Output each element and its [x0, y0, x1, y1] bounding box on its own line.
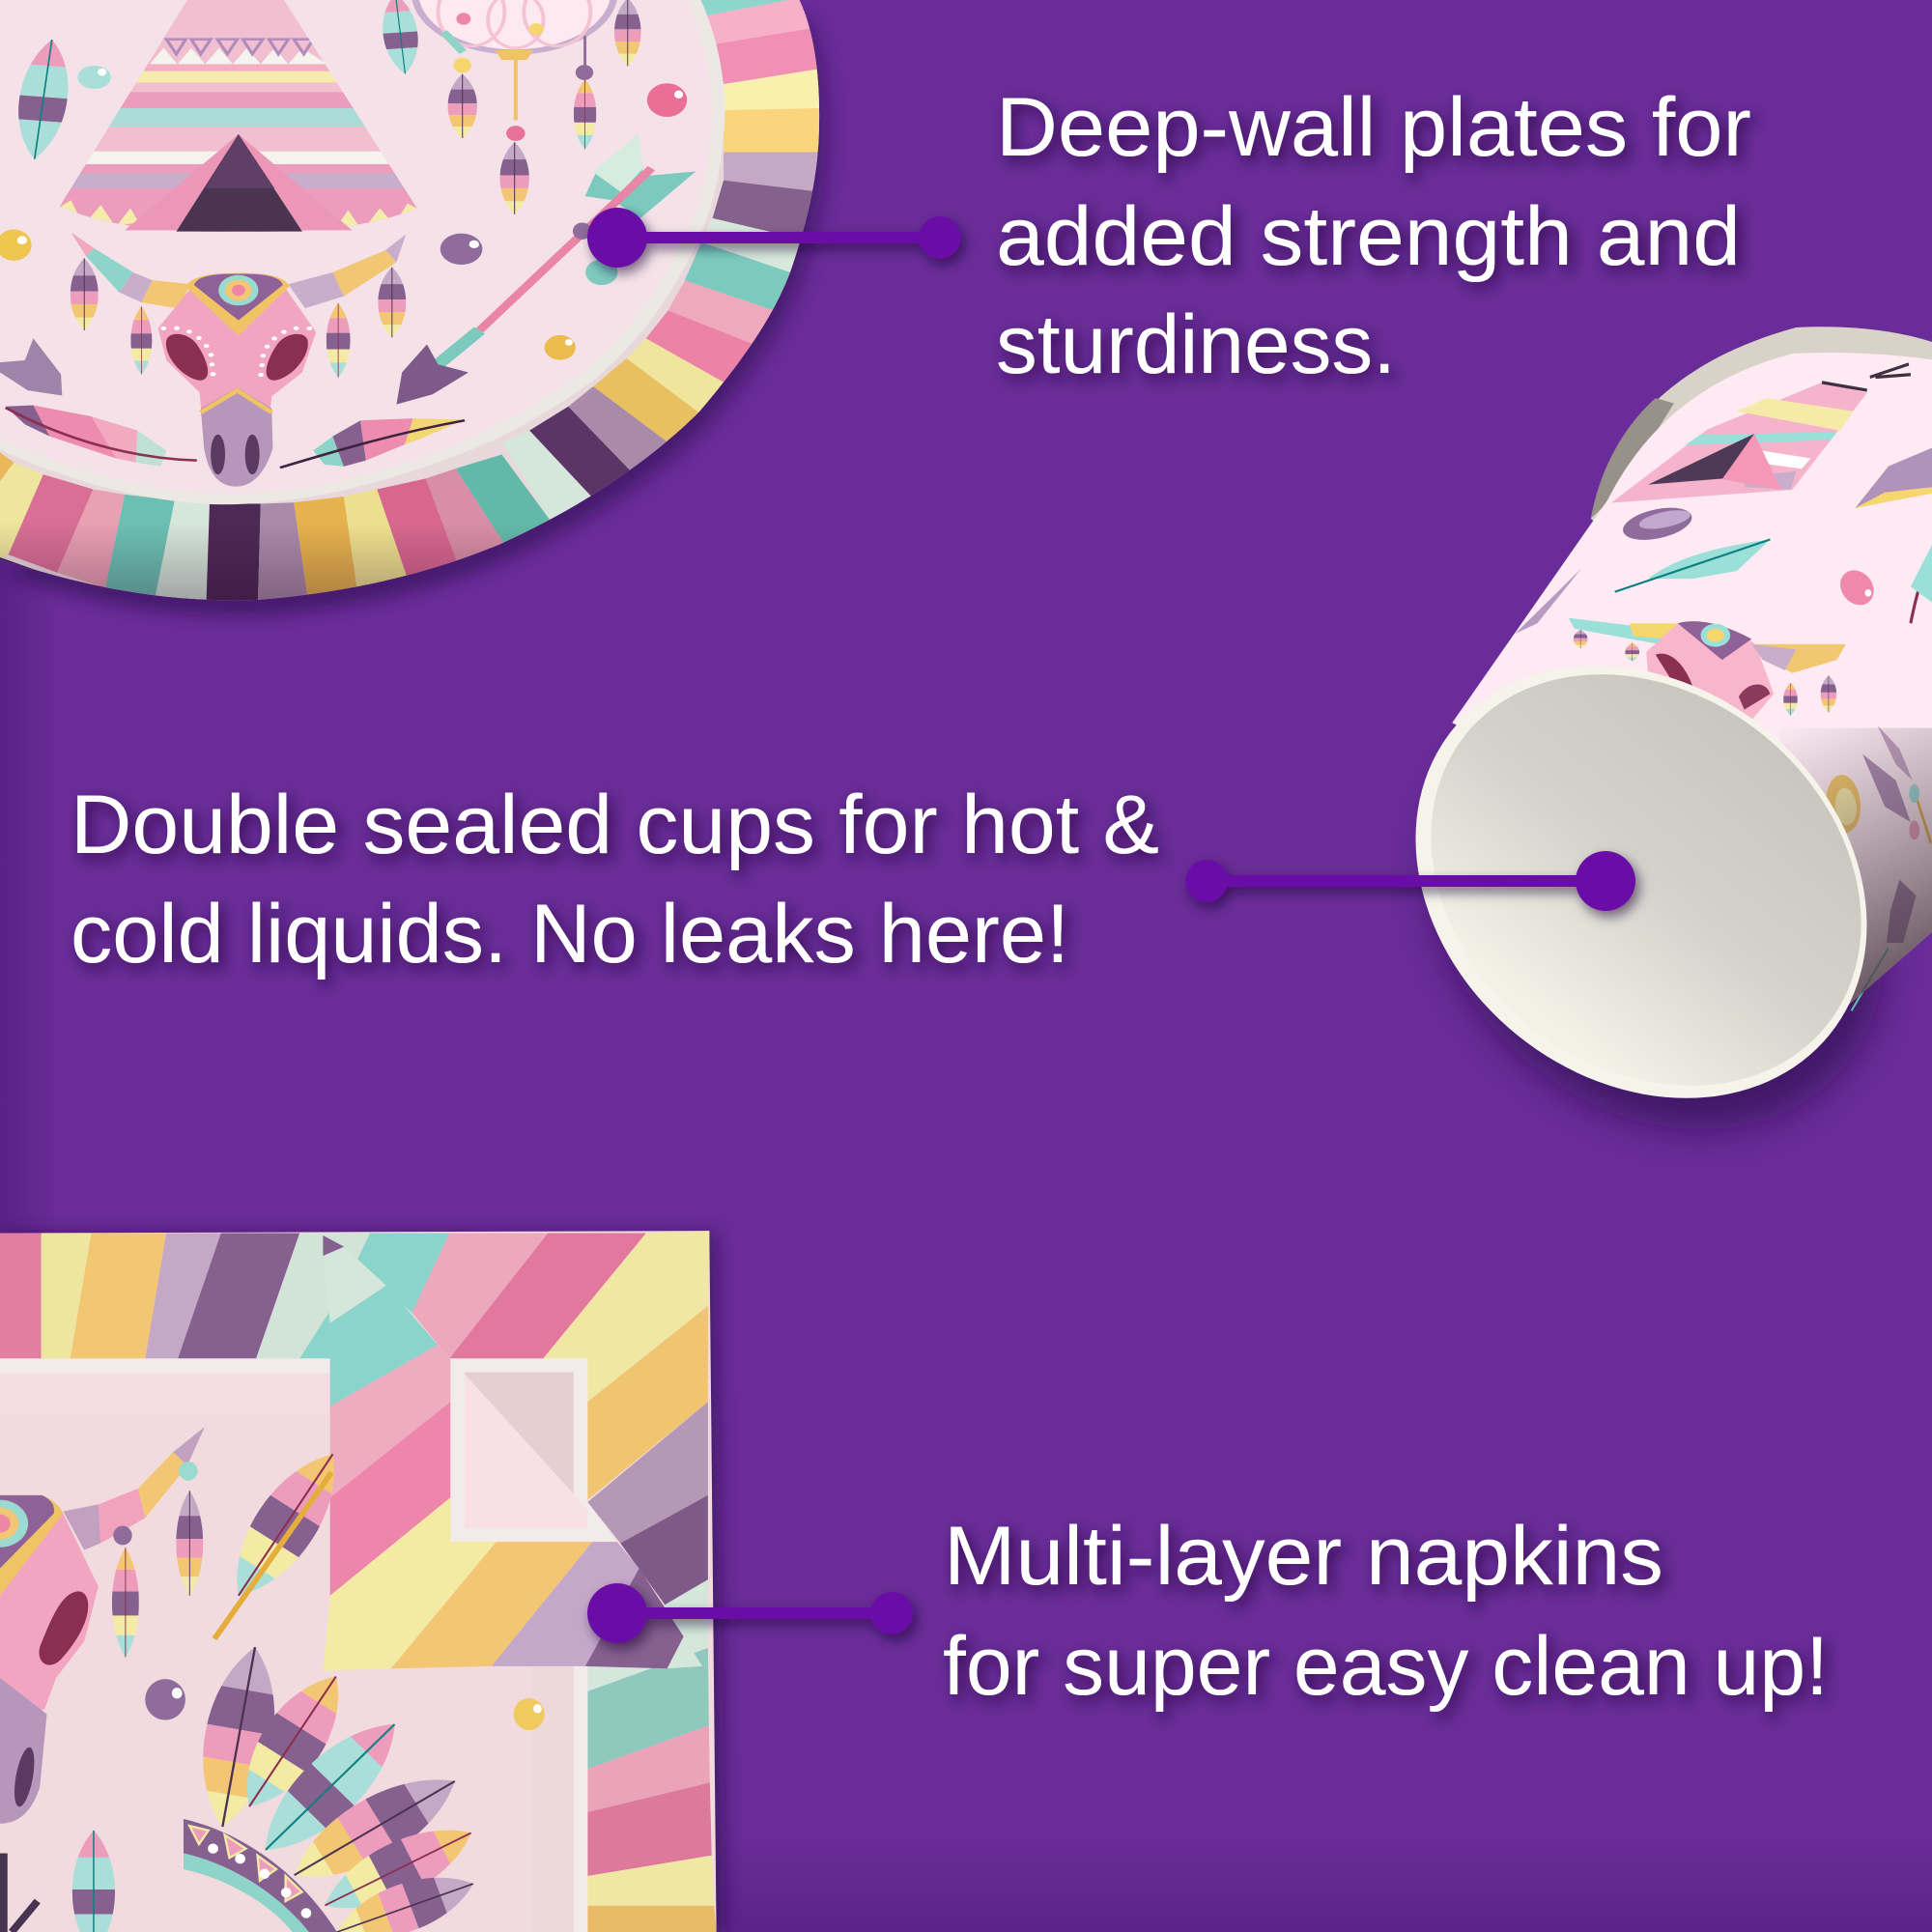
text block: napkin feature: for super easy clean up!: [943, 1620, 1829, 1713]
connector: plate callout: [587, 208, 961, 268]
cup body shading: [1777, 728, 1932, 1006]
icon: arrow on plate: [0, 134, 696, 405]
panel: napkin product photo: [0, 1231, 725, 1932]
text block: napkin feature: [943, 1510, 1829, 1713]
text block: plate feature: sturdiness.: [996, 298, 1396, 391]
napkin folded flap: [323, 1236, 702, 1671]
cup base: [1329, 577, 1932, 1187]
icon: plate feathers and beads: [0, 0, 687, 468]
icon: teepee on cup: [1611, 364, 1911, 503]
icon: dreamcatcher: [414, 0, 614, 214]
connector: cup callout: [1185, 851, 1635, 911]
icon: cup feathers and beads: [1515, 448, 1932, 1010]
icon: napkin revealed corner: [450, 1358, 617, 1542]
text block: cup feature: Double sealed cups for hot &: [71, 779, 1159, 871]
icon: war bonnet: [174, 1639, 489, 1932]
icon: napkin bull skull: [0, 1427, 210, 1824]
text block: napkin feature: Multi-layer napkins: [944, 1510, 1663, 1603]
icon: napkin feathers and beads: [4, 1431, 545, 1932]
text block: plate feature: Deep-wall plates for: [996, 81, 1751, 174]
panel: plate product photo: [0, 0, 829, 616]
icon: bull skull: [64, 232, 412, 487]
text block: cup feature: [71, 779, 1159, 980]
connector: napkin callout: [587, 1583, 913, 1643]
icon: bull skull on cup: [1569, 618, 1846, 720]
icon: teepee: [55, 0, 421, 234]
panel: cup product photo: [1329, 327, 1932, 1218]
text block: cup feature: cold liquids. No leaks here!: [71, 888, 1069, 980]
text block: plate feature: [996, 81, 1751, 391]
text block: plate feature: added strength and: [996, 190, 1741, 283]
